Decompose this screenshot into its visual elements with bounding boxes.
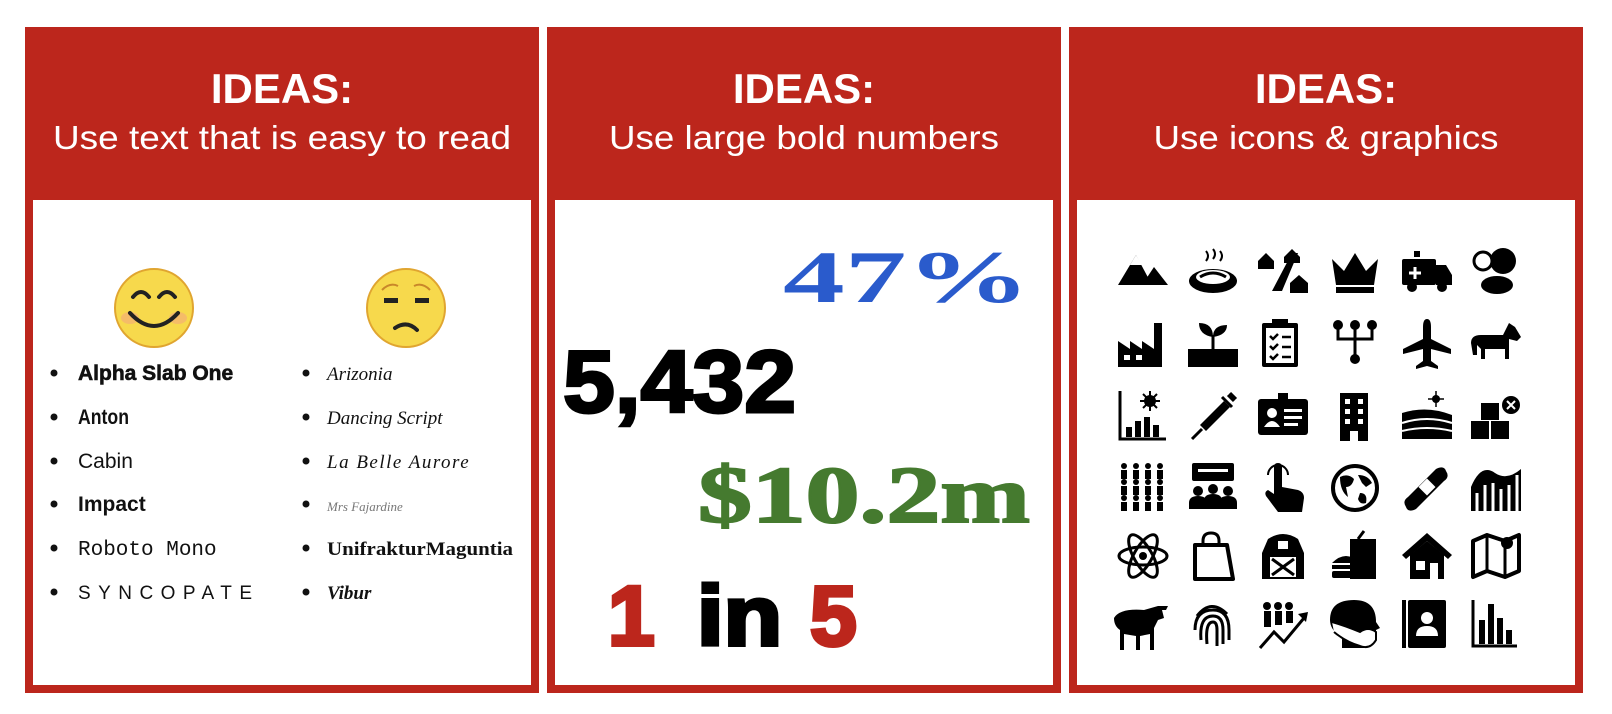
heading: panel 3: Use icons & graphics <box>1154 119 1498 156</box>
panel: numbers <box>547 27 1061 693</box>
heading: panel 1: Use text that is easy to read <box>53 119 511 156</box>
heading: panel 1: IDEAS: <box>211 65 353 112</box>
list: hard-to-read fonts <box>302 364 514 604</box>
heading: panel 2: IDEAS: <box>733 65 875 112</box>
panel: text <box>25 27 539 693</box>
number: 1 in 5: 1 <box>608 569 655 663</box>
list: readable fonts: Anton <box>78 406 129 429</box>
number: 1 in 5: 5 <box>810 569 857 663</box>
heading: panel 2: Use large bold numbers <box>609 119 999 156</box>
list: readable fonts: Alpha Slab One <box>78 362 233 385</box>
heading: panel 1 <box>53 65 511 156</box>
list: readable fonts: Impact <box>78 493 146 516</box>
number: 1 in 5: in <box>697 569 782 663</box>
list: hard-to-read fonts: UnifrakturMaguntia <box>327 539 514 560</box>
number: 47%: 47% <box>783 237 1030 319</box>
heading: panel 3: IDEAS: <box>1255 65 1397 112</box>
list: readable fonts: Cabin <box>78 450 133 473</box>
list: readable fonts: SYNCOPATE <box>78 583 253 604</box>
number: $10.2m: $10.2m <box>698 452 1030 540</box>
number: 1 in 5 <box>608 569 857 663</box>
list: readable fonts: Roboto Mono <box>78 539 217 562</box>
icon: smiling emoji <box>115 269 193 347</box>
heading: panel 3 <box>1154 65 1498 156</box>
list: hard-to-read fonts: Vibur <box>327 583 372 604</box>
list: hard-to-read fonts: Dancing Script <box>326 408 443 429</box>
icon: unamused emoji <box>367 269 445 347</box>
list: hard-to-read fonts: Mrs Fajardine <box>326 499 403 514</box>
list: hard-to-read fonts: La Belle Aurore <box>326 452 470 473</box>
icon grid <box>1114 248 1521 650</box>
heading: panel 2 <box>609 65 999 156</box>
number: 5,432: 5,432 <box>563 332 796 431</box>
panel: icons <box>1069 27 1583 693</box>
list: readable fonts <box>50 362 253 604</box>
list: hard-to-read fonts: Arizonia <box>325 364 392 385</box>
